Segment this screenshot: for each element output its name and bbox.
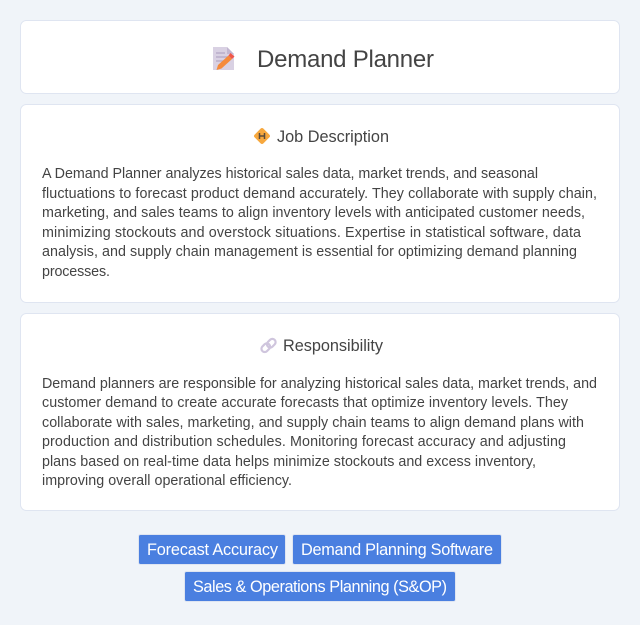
text block: responsibility: improving overall operational efficiency. xyxy=(42,473,292,489)
tag: forecast accuracy xyxy=(138,534,286,564)
panel: responsibility xyxy=(20,314,620,510)
heading: job description: Job Description xyxy=(277,128,389,146)
tag: demand planning software xyxy=(292,534,502,564)
icon: diamond road sign xyxy=(253,127,271,145)
panel: job description xyxy=(20,104,620,302)
title text: Demand Planner xyxy=(257,46,434,73)
tag: forecast accuracy: Forecast Accuracy xyxy=(147,541,279,559)
text block: job description: A Demand Planner analyzes historical sales data, market trends, and seasonal xyxy=(42,166,538,182)
text block: responsibility: customer demand to create accurate forecasts that optimize inventory levels. They xyxy=(42,395,569,411)
text block: responsibility: production and distribution schedules. Monitoring forecast accuracy and adjusting xyxy=(42,434,566,450)
tag: demand planning software: Demand Planning Software xyxy=(301,541,493,559)
icon: document with pencil xyxy=(213,47,234,70)
text block: job description: marketing, and sales teams to align inventory levels with anticipated customer needs, xyxy=(42,205,585,221)
text block: job description xyxy=(42,166,597,280)
text block: responsibility: Demand planners are responsible for analyzing historical sales data, market trends, and xyxy=(42,376,597,392)
panel: title xyxy=(20,20,620,94)
text block: responsibility xyxy=(42,376,597,489)
icon: chain link xyxy=(260,338,277,353)
text block: responsibility: plans based on real-time data helps minimize stockouts and excess inventory, xyxy=(42,454,536,470)
text block: job description: fluctuations to forecast product demand accurately. They collaborate with supply chain, xyxy=(42,186,597,202)
tags xyxy=(138,534,502,602)
text block: job description: minimizing stockouts and overstock situations. Expertise in statistical software, data xyxy=(42,225,581,241)
text block: job description: processes. xyxy=(42,264,110,280)
text block: job description: analysis, and supply chain management is essential for optimizing demand planning xyxy=(42,244,577,260)
tag: sales and operations planning xyxy=(184,572,456,602)
tag: sales and operations planning: Sales & Operations Planning (S&OP) xyxy=(193,578,447,596)
text block: responsibility: collaborate with sales, marketing, and supply chain teams to align demand plans with xyxy=(42,415,584,431)
heading: responsibility: Responsibility xyxy=(283,337,384,355)
